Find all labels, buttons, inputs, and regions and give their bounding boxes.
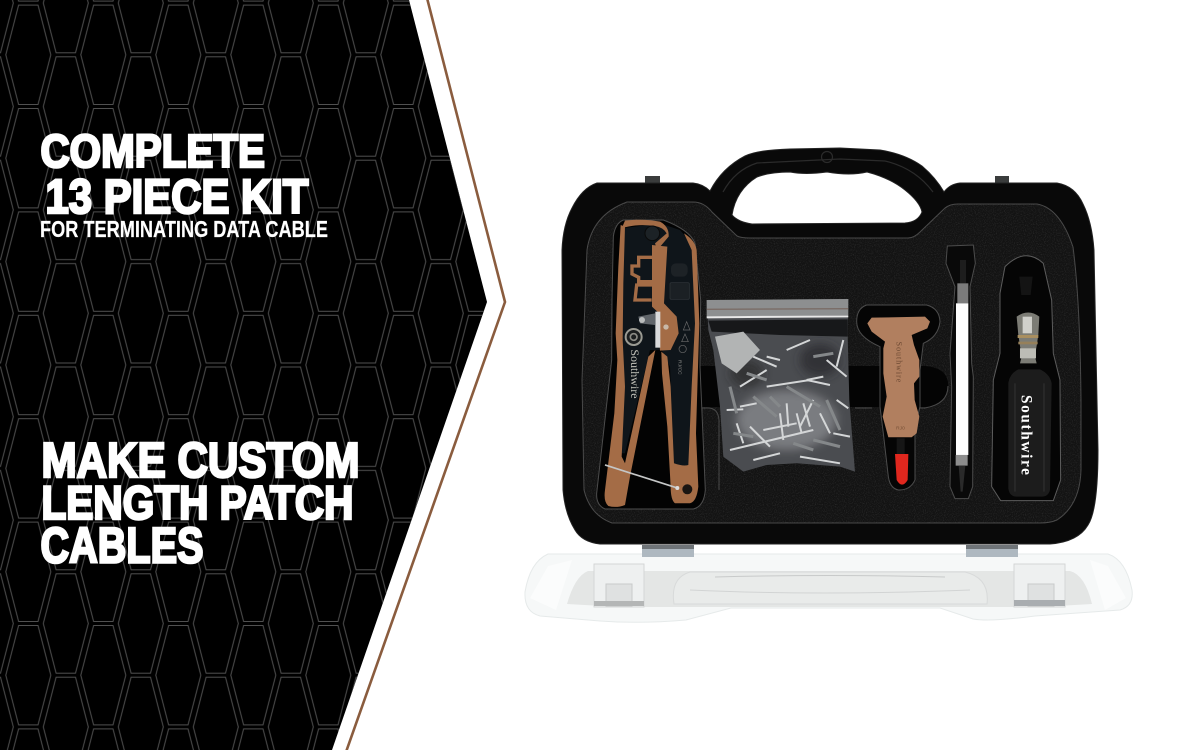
bit shaft xyxy=(956,260,968,492)
t-tool pocket xyxy=(857,305,940,490)
crimper blade xyxy=(655,312,660,348)
black tool case body and handle xyxy=(562,148,1098,544)
crimping tool xyxy=(597,220,705,509)
red tip xyxy=(895,438,908,485)
heading: make custom length patch cables: MAKE CUSTOM xyxy=(42,433,360,488)
right handle xyxy=(661,233,699,503)
bit pocket xyxy=(946,245,975,499)
brand logo xyxy=(626,329,642,345)
crimper pocket xyxy=(597,220,705,509)
brown chevron outline xyxy=(346,0,505,750)
pin xyxy=(605,465,678,488)
transparent case lid xyxy=(525,554,1132,622)
bag shading xyxy=(730,343,840,450)
bag of connectors xyxy=(707,299,855,472)
screwdriver brand text: Southwire xyxy=(1018,395,1035,475)
heading: complete 13 piece kit: FOR TERMINATING DATA CABLE xyxy=(40,216,328,242)
t-tool model text: RJ0 xyxy=(896,425,905,431)
t-tool brand text: Southwire xyxy=(895,342,904,383)
hidden driver tip xyxy=(1019,277,1033,295)
t-shaped cable tool xyxy=(857,305,940,490)
double-ended bit xyxy=(946,245,975,499)
case latches xyxy=(645,176,1009,184)
foam contour lines around slot xyxy=(702,386,948,490)
heading: complete 13 piece kit: 13 PIECE KIT xyxy=(46,171,308,224)
crimper brand text: Southwire xyxy=(628,349,642,399)
foam slot behind tools xyxy=(700,366,948,407)
heading: make custom length patch cables xyxy=(40,433,360,574)
heading: complete 13 piece kit: COMPLETE xyxy=(40,125,265,177)
heading: make custom length patch cables: LENGTH PATCH xyxy=(42,476,354,529)
screwdriver metal collar xyxy=(1017,312,1039,363)
crimper body xyxy=(617,223,698,467)
hinges xyxy=(642,545,1018,557)
panel: black hexagon-pattern arrow xyxy=(0,0,487,750)
crimper head xyxy=(622,220,669,250)
handle rim and hole xyxy=(723,152,933,192)
crimper model text: RJ/CC xyxy=(676,360,682,375)
left handle xyxy=(605,225,655,507)
warning marks xyxy=(679,322,690,353)
t-tool body xyxy=(867,317,930,437)
handle ribs xyxy=(1015,383,1044,492)
heading: make custom length patch cables: CABLES xyxy=(40,518,204,574)
screwdriver pocket xyxy=(992,256,1061,501)
foam tray xyxy=(582,202,1081,523)
screwdriver handle xyxy=(1008,369,1052,497)
heading: complete 13 piece kit xyxy=(40,125,328,242)
screwdriver xyxy=(992,256,1061,501)
